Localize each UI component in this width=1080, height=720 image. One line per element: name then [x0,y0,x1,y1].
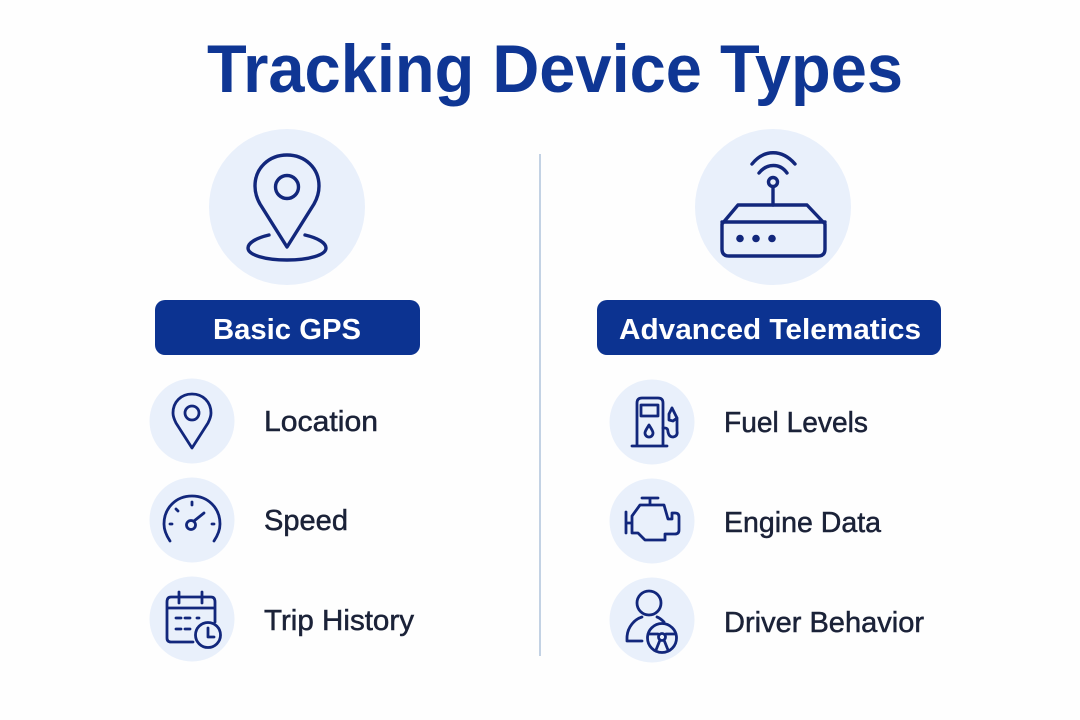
icon: map pin on ring [209,129,365,285]
heading pill: Basic GPS: Basic GPS [213,314,361,346]
panel: Advanced Telematics [597,129,941,662]
item: Fuel Levels: Fuel Levels [724,407,868,439]
item: Location [150,378,378,464]
heading pill: Advanced Telematics [597,300,941,355]
title: Tracking Device Types [207,31,903,107]
item: Driver Behavior [610,578,924,662]
icon: router with wifi [695,129,851,285]
heading pill: Advanced Telematics: Advanced Telematics [619,314,921,346]
item: Speed: Speed [264,505,348,537]
item: Location: Location [264,406,378,438]
item: Fuel Levels [610,380,868,464]
item: Driver Behavior: Driver Behavior [724,607,924,639]
item: Trip History [150,576,415,662]
center divider [539,154,541,656]
item: Trip History: Trip History [264,605,415,637]
item: Engine Data [610,478,882,564]
panel: Basic GPS [150,129,420,662]
item: Speed [150,478,348,562]
heading pill: Basic GPS [155,300,420,355]
item: Engine Data: Engine Data [724,507,882,539]
